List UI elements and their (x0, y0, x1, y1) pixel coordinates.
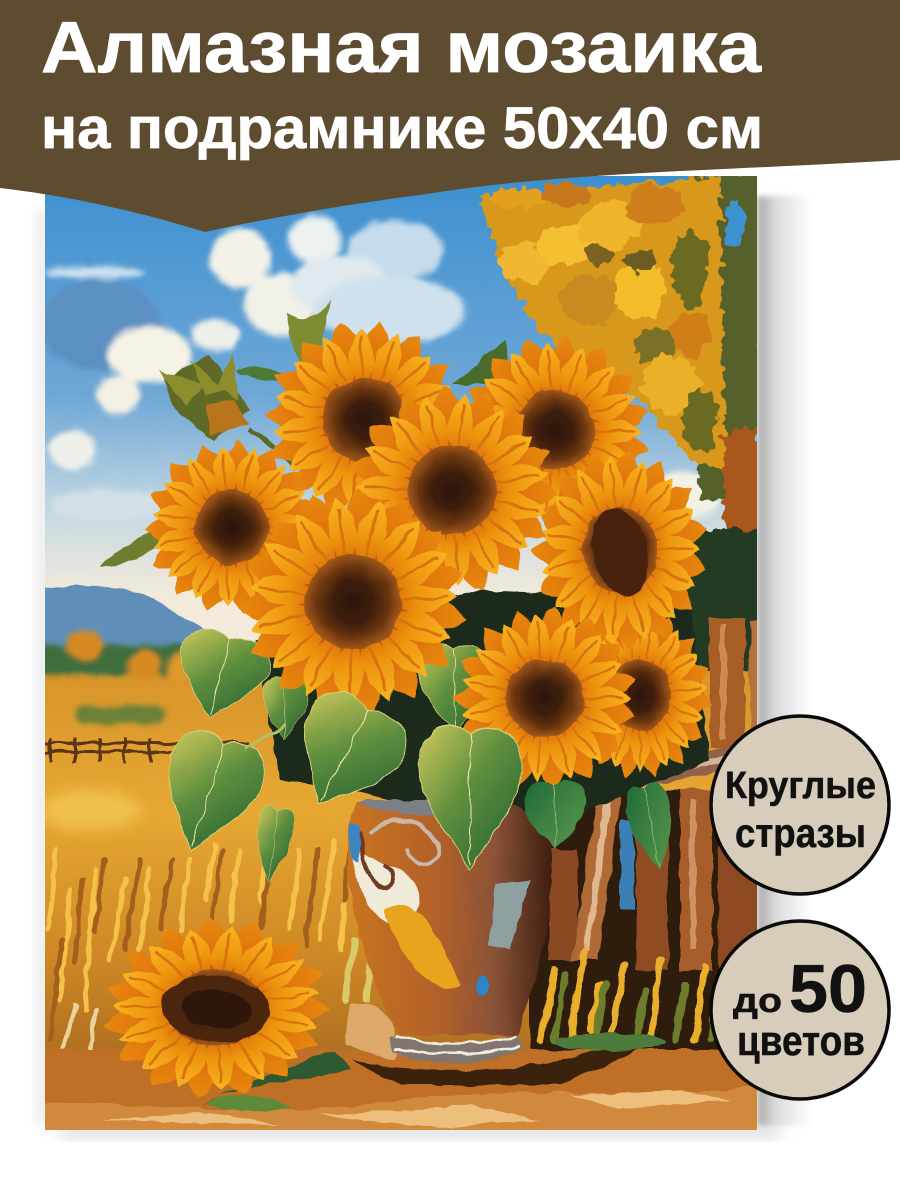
sunflower lower right (452, 607, 636, 786)
badge: up to 50 colours: 50 (789, 951, 867, 1027)
dark foliage behind flowers (255, 590, 710, 830)
painting: sunflowers canvas (35, 170, 770, 1142)
middle leaves (180, 628, 482, 740)
sunflower far right (598, 618, 712, 779)
badge: round rhinestones (711, 716, 889, 894)
badge: round rhinestones: стразы (735, 810, 866, 856)
lower leaves (168, 690, 672, 883)
sunflower upper right (468, 336, 649, 509)
tree trunk and bush (686, 426, 757, 672)
sunflower left (144, 439, 310, 614)
badge: round rhinestones: Круглые (725, 765, 876, 807)
grass near vase (345, 940, 735, 1045)
title: Алмазная мозаика (41, 8, 762, 88)
right fence (530, 618, 770, 1060)
badge: up to 50 colours (711, 921, 889, 1099)
upper leaves (100, 300, 512, 568)
hills (45, 584, 204, 674)
sunflower centre (240, 488, 467, 710)
title: на подрамнике 50х40 см (41, 96, 763, 161)
wheat strokes (46, 838, 349, 1050)
sunflower right (530, 450, 707, 652)
badge: up to 50 colours: цветов (737, 1017, 865, 1064)
clouds (40, 216, 721, 521)
badge: up to 50 colours: до (733, 982, 782, 1020)
ground sunflower (95, 910, 350, 1111)
left fence (45, 738, 250, 762)
field (35, 672, 770, 1142)
stem (245, 725, 285, 748)
distant trees (35, 630, 200, 724)
canvas drop shadow (36, 196, 812, 1138)
vase (347, 800, 552, 1063)
tree foliage (478, 176, 760, 500)
sunflower middle (350, 385, 558, 590)
header banner (0, 0, 900, 232)
sunflower top (265, 321, 459, 509)
bud (160, 352, 295, 470)
sky (35, 170, 770, 670)
title (41, 8, 763, 161)
ground (35, 1004, 770, 1140)
